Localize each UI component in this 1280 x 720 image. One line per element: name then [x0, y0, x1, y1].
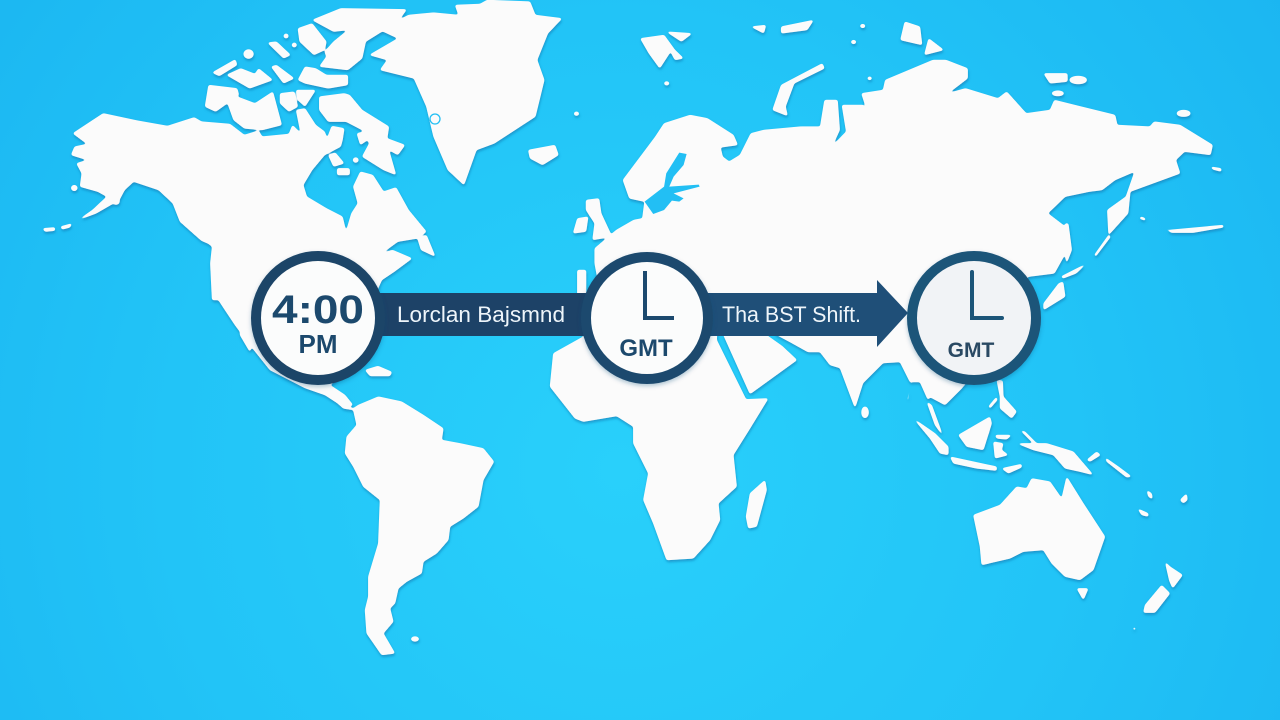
arrow: The BST Shift [705, 280, 908, 347]
clock: GMT right [912, 256, 1036, 380]
Iceland [528, 145, 559, 165]
Mexico and Central America [212, 290, 365, 408]
clock: 4:00 PM [256, 256, 380, 380]
arrow text: Tha BST Shift. [722, 302, 861, 327]
clock: GMT centre [586, 257, 708, 379]
North America and Arctic islands [42, 8, 435, 300]
clock hands [972, 272, 1002, 318]
Baltic Sea [645, 153, 700, 214]
Africa [550, 307, 768, 560]
banner text: London: Lorclan Bajsmnd [397, 302, 565, 327]
time label: 4:00 [272, 288, 364, 332]
Maritime Asia and Australasia [861, 380, 1187, 630]
period label: PM [298, 329, 338, 359]
GMT label: GMT [619, 335, 673, 362]
Greenland [369, 0, 562, 185]
South Asia and Indochina [775, 250, 1010, 408]
clock hands [645, 271, 674, 318]
connector: London banner [378, 293, 588, 336]
Baja and Cuba [240, 323, 252, 352]
Madagascar [746, 480, 767, 528]
South America [320, 387, 494, 655]
Greenland lake [430, 114, 440, 124]
Arabia [723, 334, 797, 394]
Eurasia [573, 20, 1224, 310]
GMT label: GMT [948, 339, 994, 362]
